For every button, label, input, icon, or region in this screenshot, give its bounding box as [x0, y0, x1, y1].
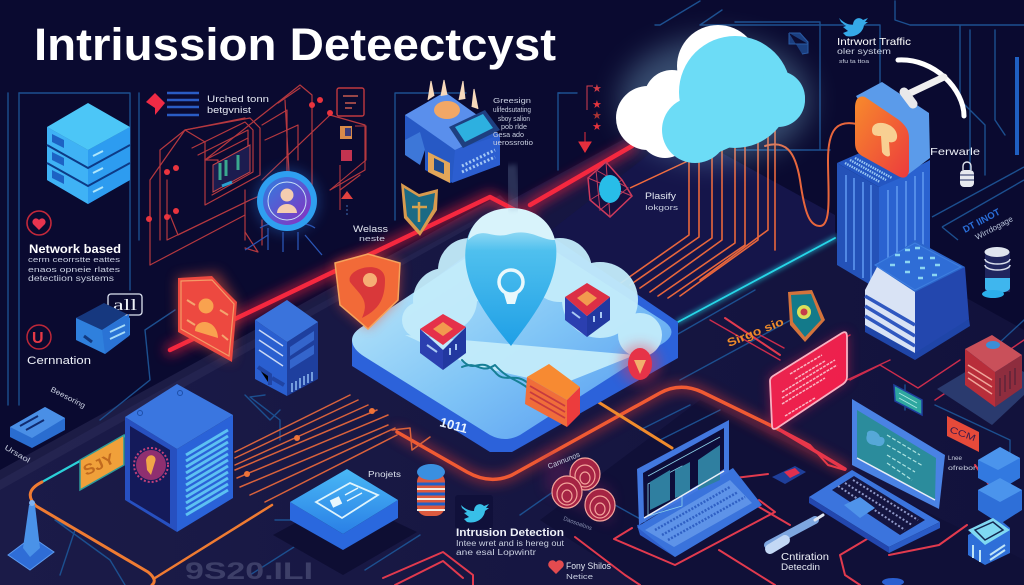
middle blue server — [255, 300, 318, 396]
text: urched tonn: betgvnist — [207, 105, 252, 115]
panel: intrusion detection: Intrusion Detection — [456, 527, 564, 539]
red card — [770, 332, 847, 430]
text: cntiration detection — [781, 552, 829, 572]
icon: white arc and hammer — [898, 60, 964, 116]
panel: intrusion detection: Intee wret and is hereg out — [456, 539, 565, 548]
text: network based: Network based — [29, 242, 121, 256]
icon: stars and arrow: ★ — [592, 99, 602, 111]
text: cernnation: Cernnation — [27, 355, 91, 367]
text: 1011: 1011 — [438, 414, 469, 436]
text: machine caption: Gesa ado — [493, 130, 524, 139]
orange parallel bus lines — [235, 395, 430, 502]
big red connection line — [170, 146, 632, 350]
icon and text: forty shilos — [548, 560, 611, 581]
laptop right — [809, 399, 945, 553]
shield: left red user card — [177, 272, 237, 362]
icon: user profile circle — [245, 168, 322, 255]
text: beesoring label: Beesoring — [49, 385, 87, 410]
text: internet traffic: Intrwort Traffic — [837, 36, 911, 48]
small teal screen — [894, 385, 922, 415]
icon: usb plug — [768, 515, 823, 549]
panel: intrusion detection: ane esal Lopwintr — [456, 548, 536, 557]
icon and text: forty shilos: Fony Shilos — [566, 561, 611, 571]
panel: rotated DT label: DT IINOT — [961, 207, 1002, 236]
cloud icon — [616, 25, 810, 163]
icon: red arrow with blue lines — [146, 93, 199, 115]
icon: colorful shield — [788, 290, 825, 342]
icon: red badge on platform — [620, 344, 660, 384]
red and blue cube right — [565, 283, 610, 337]
text: firewall: Ferwarle — [930, 146, 980, 158]
icon: stars and arrow — [579, 83, 602, 152]
text: plasify: Plasify — [645, 191, 677, 201]
shield drop with bulb — [465, 165, 556, 346]
text: plasify: Iokgors — [645, 203, 678, 212]
text: internet traffic: sfu ta ttoa — [839, 59, 869, 65]
panel: rotated DT label — [932, 167, 1024, 242]
text: internet traffic: oler system — [837, 46, 891, 56]
icon: bottom blue ellipse — [882, 578, 904, 585]
text: plasify — [645, 191, 678, 212]
text: wireless note — [353, 224, 389, 243]
text: network based: detectiion systems — [28, 273, 114, 283]
text: urched tonn — [207, 94, 269, 115]
badge: red small label — [947, 416, 979, 472]
circuit: red concentric lines — [146, 85, 365, 265]
text: network based — [28, 242, 121, 283]
large blue server — [125, 384, 233, 532]
orange cable to firewall — [765, 123, 857, 226]
database stack bottom — [417, 464, 445, 516]
icon and text: forty shilos: Netice — [566, 572, 593, 581]
orange route line left — [30, 436, 272, 585]
firewall tower — [837, 82, 930, 295]
text: machine caption: uerossrotio — [493, 138, 533, 147]
red device on plate — [937, 335, 1024, 425]
text: machine caption: sboy salion — [498, 114, 530, 123]
badge: red small label: Lnee — [948, 456, 963, 462]
orange cube — [525, 364, 580, 427]
cyan box with base — [273, 469, 417, 575]
shield: orange face — [335, 254, 400, 329]
icon: small blue box — [76, 303, 130, 354]
red and blue cube left — [420, 314, 466, 370]
laptop left — [637, 420, 762, 557]
icon: top blue machine — [405, 80, 500, 183]
title: Intriussion Deteectcyst — [34, 19, 556, 70]
icon: small lock — [960, 162, 974, 187]
right blue server building — [865, 240, 970, 360]
text: network based: cerm ceorrstte eattes — [28, 255, 120, 264]
text: projects: Pnojets — [368, 469, 401, 479]
text: wireless note: Welass — [353, 224, 389, 234]
icon: all label box — [108, 294, 142, 315]
text: network based: enaos opneie rlates — [28, 265, 120, 274]
icon: red fingerprint glyphs — [545, 450, 615, 525]
text: urched tonn: Urched tonn — [207, 94, 269, 104]
icon: small device chip — [772, 466, 806, 484]
icon: server stack — [47, 103, 130, 204]
text: machine caption — [493, 96, 533, 147]
icon: stars and arrow: ★ — [592, 83, 602, 95]
text: ursaol label: Ursaol — [3, 443, 32, 465]
right cyan qr block — [968, 518, 1010, 565]
chain link — [462, 360, 530, 390]
right blue blocks — [978, 447, 1022, 524]
icon: twitter bird top — [839, 18, 868, 36]
icon: document outline — [789, 33, 808, 54]
icon: red U circle — [27, 325, 51, 349]
cyan glow line — [678, 238, 835, 322]
text: small bottom label: Daosoalons — [562, 516, 593, 532]
right red thin lines — [710, 320, 1024, 400]
text: cntiration detection: Detecdin — [781, 562, 820, 572]
text: internet traffic — [837, 36, 911, 65]
orange red main bus line — [397, 387, 845, 479]
badge: orange SJY: SJY — [81, 450, 118, 480]
icon: small teal shield — [401, 183, 438, 236]
badge: red small label: ofrebor — [948, 466, 976, 472]
icon: heart circle — [27, 211, 51, 235]
badge: red small label: CCM — [948, 424, 977, 443]
text: machine caption: Greesign — [493, 96, 531, 105]
central cloud — [402, 238, 662, 385]
icon: stars and arrow: ★ — [592, 110, 602, 122]
panel: rotated DT label: Wirrdogage — [974, 214, 1015, 242]
text: wireless note: neste — [359, 234, 385, 243]
panel: intrusion detection — [455, 495, 565, 557]
orange lines under cloud — [618, 120, 775, 298]
text: cntiration detection: Cntiration — [781, 552, 829, 563]
icon: red U circle: U — [32, 330, 44, 347]
icon: tower beacon — [8, 500, 54, 570]
icon: all label box: all — [113, 297, 138, 314]
text: rotated orange label: Sirgo sio — [726, 316, 786, 350]
text: cannunos: Cannunos — [546, 450, 581, 471]
icons: document and thumbnails — [330, 88, 366, 215]
icon: database cylinder right — [982, 247, 1010, 298]
icon: red spider web badge — [588, 160, 690, 217]
central platform — [352, 215, 678, 452]
text: machine caption: ulifedsutating — [493, 105, 531, 114]
badge: orange SJY — [80, 435, 124, 490]
icon: stars and arrow: ★ — [592, 121, 602, 133]
icon: left small device — [10, 407, 65, 448]
watermark: 9S20.ILI — [185, 558, 313, 585]
red connector lines — [383, 318, 1000, 585]
text: machine caption: pob rlde — [501, 122, 527, 131]
right blue vertical lines — [1015, 57, 1019, 155]
icon: small screen in circuit — [213, 145, 250, 192]
